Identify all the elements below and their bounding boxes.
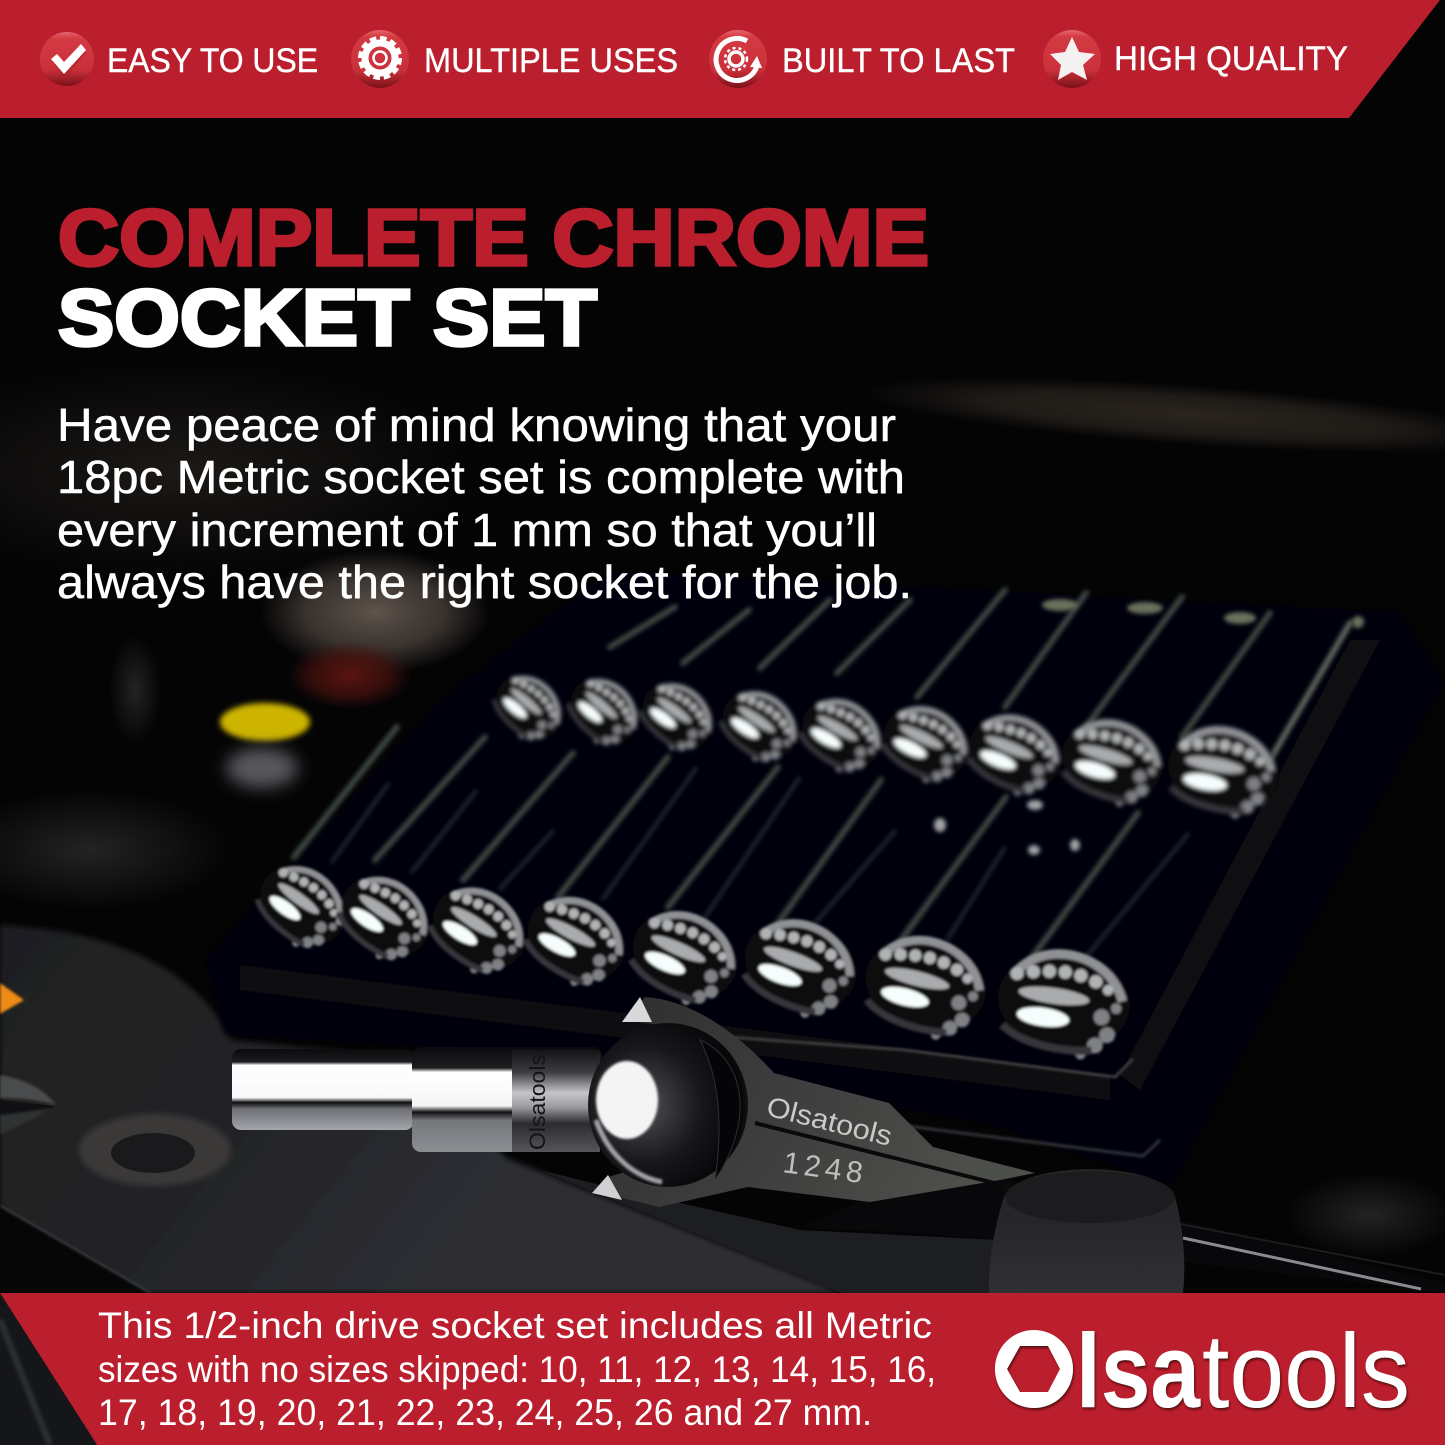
- chrome socket on ratchet: Olsatools: [525, 1054, 550, 1150]
- label: high quality: HIGH QUALITY: [1114, 40, 1348, 78]
- body text: 18pc Metric socket set is complete with: [57, 451, 905, 503]
- bottom text: sizes with no sizes skipped: 10, 11, 12, 13, 14, 15, 16,: [98, 1349, 936, 1390]
- logo: Olsatools: [995, 1313, 1410, 1430]
- body text: every increment of 1 mm so that you’ll: [57, 504, 877, 556]
- logo: Olsatools: tools: [1202, 1313, 1410, 1430]
- label: multiple uses: MULTIPLE USES: [424, 42, 678, 80]
- title: SOCKET SET: [58, 273, 597, 362]
- badge: built to last: [709, 30, 767, 88]
- handle number: 1248: [781, 1146, 865, 1190]
- body text: Have peace of mind knowing that your: [57, 399, 896, 451]
- top row sockets: [482, 663, 1284, 825]
- title: COMPLETE CHROME: [58, 193, 929, 282]
- bottom banner: [0, 1293, 1445, 1445]
- ratchet handle: [592, 997, 1445, 1293]
- rod tips: [1042, 599, 1364, 628]
- badge: high quality: [1043, 30, 1101, 88]
- bottom row sockets: [243, 850, 1136, 1065]
- label: easy to use: EASY TO USE: [107, 42, 318, 80]
- bottom text: 17, 18, 19, 20, 21, 22, 23, 24, 25, 26 and 27 mm.: [98, 1392, 872, 1433]
- hood surface: [0, 925, 1000, 1293]
- yellow blurred part: [220, 703, 310, 741]
- label: built to last: BUILT TO LAST: [782, 42, 1015, 80]
- handle brand text: Olsatools: [764, 1091, 895, 1152]
- badge: easy to use: [40, 32, 94, 86]
- body text: always have the right socket for the job.: [57, 556, 912, 608]
- orange marker: [0, 983, 24, 1014]
- body text: [57, 399, 912, 608]
- chrome socket on ratchet: [232, 1023, 748, 1187]
- title: [58, 193, 929, 362]
- top banner: [0, 0, 1440, 118]
- rods: [294, 590, 1350, 963]
- socket tray with rods and sockets: [205, 570, 1445, 1186]
- rubber handle cap: [989, 1169, 1184, 1293]
- logo: Olsatools: lsa: [1076, 1313, 1201, 1430]
- badge: multiple uses: [351, 30, 409, 88]
- bottom text: This 1/2-inch drive socket set includes all Metric: [98, 1305, 932, 1346]
- bottom text: [98, 1305, 936, 1433]
